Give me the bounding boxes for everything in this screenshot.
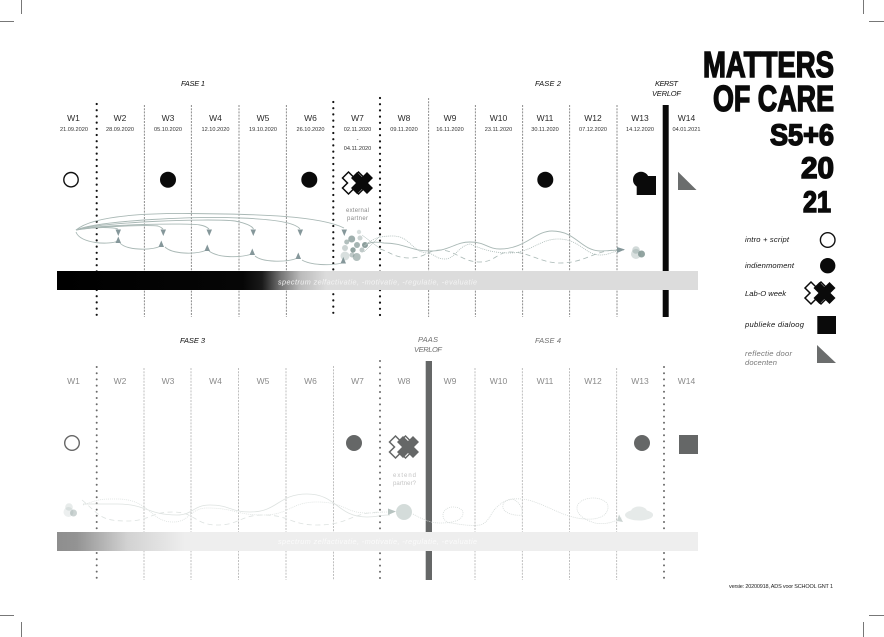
week labels top: -: [357, 137, 359, 143]
spectrum bar bottom: spectrum zelfactivatie, -motivatie, -regulatie, -evaluatie: [278, 537, 477, 546]
week labels bottom: W14: [678, 376, 696, 386]
legend: intro + script: [745, 235, 790, 244]
week labels bottom: W11: [537, 376, 554, 386]
week labels top: 05.10.2020: [154, 127, 182, 133]
version note: versie: 20200918, ADS voor SCHOOL GNT 1: [729, 584, 833, 590]
phase headings top: FASE 2: [535, 79, 562, 88]
week labels bottom: W8: [398, 376, 411, 386]
week labels top: W10: [490, 113, 508, 123]
feedback loop arcs: [76, 213, 347, 265]
week labels top: W7: [351, 113, 364, 123]
spectrum bar top: spectrum zelfactivatie, -motivatie, -regulatie, -evaluatie: [278, 278, 477, 286]
icon: Lab-O week top: [342, 172, 373, 194]
external partner note top: external: [346, 208, 369, 214]
blob cluster bottom: [396, 504, 412, 520]
week labels top: W4: [209, 113, 222, 123]
week labels bottom: W5: [257, 376, 270, 386]
week labels top: W5: [257, 113, 270, 123]
legend: publieke dialoog: [744, 320, 805, 329]
top milestones: [64, 172, 697, 195]
week labels top: 23.11.2020: [485, 127, 512, 133]
week labels bottom: [67, 376, 696, 386]
week labels top: 19.10.2020: [249, 127, 277, 133]
week labels top: 02.11.2020: [344, 127, 371, 133]
week labels top: 21.09.2020: [60, 127, 88, 133]
phase headings bottom: VERLOF: [414, 345, 442, 354]
week labels bottom: W2: [114, 376, 127, 386]
phase headings top: [181, 79, 681, 98]
week labels bottom: W9: [444, 376, 457, 386]
legend: Lab-O week: [745, 289, 787, 298]
phase headings top: KERST: [655, 79, 679, 88]
phase headings bottom: [180, 335, 561, 354]
title: MATTERS: [703, 44, 834, 85]
week labels bottom: W7: [351, 376, 364, 386]
legend: docenten: [745, 358, 777, 367]
title: OF CARE: [713, 78, 834, 119]
week labels bottom: W6: [304, 376, 317, 386]
title: 20: [801, 152, 834, 185]
cloud end state: [625, 506, 653, 520]
spectrum bar top: [57, 271, 698, 290]
week labels bottom: W3: [162, 376, 175, 386]
legend: [744, 233, 836, 367]
external partner note bottom: partner?: [393, 481, 417, 487]
external partner note top: [346, 208, 369, 222]
week labels bottom: W1: [67, 376, 80, 386]
week labels top: W2: [114, 113, 127, 123]
external partner note bottom: extend: [393, 473, 416, 479]
external partner note top: partner: [347, 216, 368, 222]
week labels top: 14.12.2020: [626, 127, 654, 133]
week labels top: W13: [631, 113, 649, 123]
week labels top: 07.12.2020: [579, 127, 607, 133]
external partner note bottom: [393, 473, 417, 487]
week labels top: W6: [304, 113, 317, 123]
week labels top: 26.10.2020: [296, 127, 324, 133]
bottom timeline grid: [97, 361, 664, 580]
week labels top: W11: [537, 113, 554, 123]
week labels top: 30.11.2020: [531, 127, 559, 133]
week labels top: W14: [678, 113, 696, 123]
start cluster bottom: [64, 503, 77, 517]
week labels top: 16.11.2020: [436, 127, 464, 133]
week labels bottom: W12: [584, 376, 602, 386]
week labels top: 04.11.2020: [344, 146, 371, 152]
phase headings bottom: FASE 3: [180, 336, 206, 345]
week labels top: 09.11.2020: [390, 127, 418, 133]
phase headings top: FASE 1: [181, 79, 205, 88]
title: [703, 44, 834, 219]
end cluster top: [631, 246, 645, 259]
week labels top: W8: [398, 113, 411, 123]
week labels bottom: W10: [490, 376, 508, 386]
week labels top: W12: [584, 113, 602, 123]
week labels top: 04.01.2021: [672, 127, 700, 133]
legend: indienmoment: [745, 261, 795, 270]
spectrum bar bottom: [57, 532, 698, 551]
title: 21: [803, 186, 831, 219]
phase headings top: VERLOF: [652, 89, 681, 98]
phase headings bottom: FASE 4: [535, 336, 561, 345]
week labels top: [60, 113, 700, 152]
bottom milestones: [65, 435, 698, 454]
cluster of participants top: [340, 230, 368, 261]
week labels top: 28.09.2020: [106, 127, 134, 133]
week labels top: W1: [67, 113, 80, 123]
week labels bottom: W13: [631, 376, 649, 386]
week labels bottom: W4: [209, 376, 222, 386]
week labels top: W3: [162, 113, 175, 123]
title: S5+6: [770, 119, 834, 152]
icon: Lab-O week bottom: [390, 436, 419, 458]
legend: reflectie door: [745, 349, 792, 358]
wavy process lines bottom: [82, 494, 396, 525]
kerst verlof bar: [663, 105, 669, 317]
paas verlof bar: [426, 361, 432, 580]
wavy process lines top: [362, 231, 625, 263]
dotted looping path: [413, 498, 623, 525]
phase headings bottom: PAAS: [418, 335, 438, 344]
top timeline grid: [97, 98, 617, 317]
week labels top: W9: [444, 113, 457, 123]
week labels top: 12.10.2020: [202, 127, 230, 133]
